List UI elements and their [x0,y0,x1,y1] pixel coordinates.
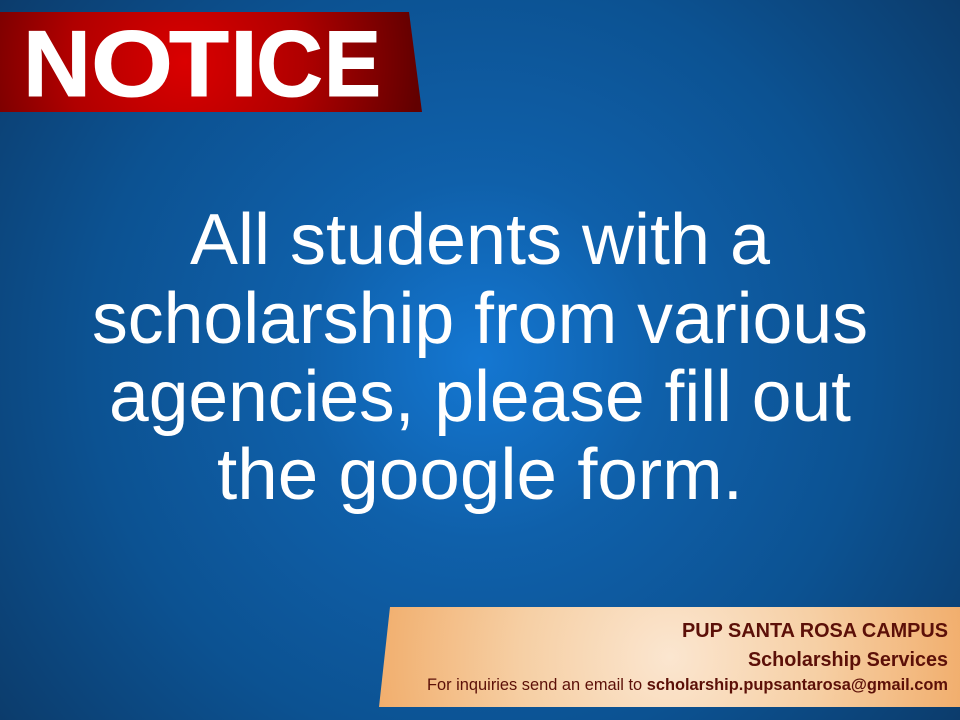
contact line: For inquiries send an email to scholarship.pupsantarosa@gmail.com [427,676,948,694]
notice heading: T [169,11,229,116]
footer banner [379,607,960,707]
main message: scholarship from various [92,279,868,359]
main message: agencies, please fill out [109,357,851,437]
notice heading: N [23,11,91,116]
campus name: PUP SANTA ROSA CAMPUS [682,619,948,642]
notice heading: O [91,11,173,116]
main message: the google form. [217,435,743,515]
office name: Scholarship Services [748,648,948,671]
notice heading: E [324,11,381,116]
notice heading: I [230,11,258,116]
main message: All students with a [190,200,771,280]
notice banner [0,11,422,116]
notice heading: C [256,11,323,116]
main message [92,200,868,515]
notice heading [23,11,381,116]
